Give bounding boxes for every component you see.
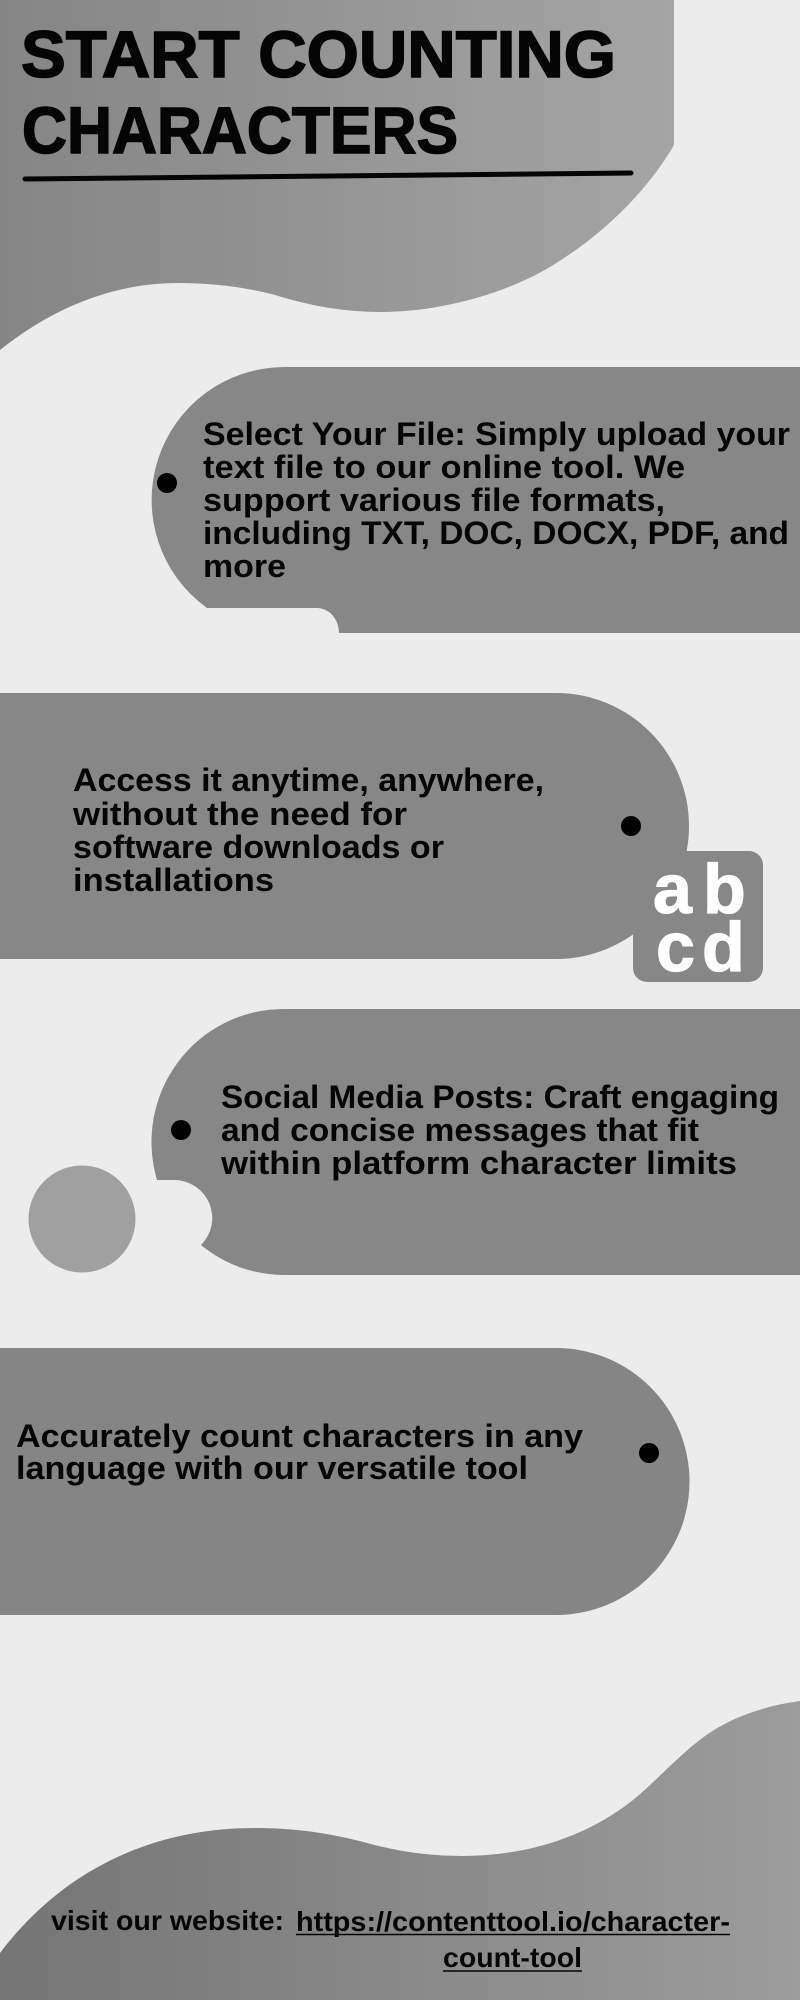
panel: social media posts (151, 1009, 800, 1275)
panel: accurately count (0, 1348, 690, 1615)
panel 2 background (0, 693, 689, 959)
panel 3 bullet (171, 1120, 191, 1140)
panel 1 bullet (157, 473, 177, 493)
panel 4 text: language with our versatile tool (16, 1450, 528, 1486)
panel 4 text: Accurately count characters in any (16, 1418, 583, 1454)
panel 4 text (16, 1418, 583, 1486)
panel 1 text (203, 416, 790, 584)
panel: access anytime (0, 693, 689, 959)
panel 1 text: more (203, 548, 286, 584)
panel 1 background (152, 367, 800, 633)
panel 2 text: Access it anytime, anywhere, (73, 762, 544, 798)
title: START COUNTING (21, 17, 616, 91)
icon: abcd letter tile: a (653, 850, 693, 928)
icon: abcd letter tile: b (703, 850, 746, 928)
footer label: visit our website: (51, 1905, 284, 1936)
panel 2 text: software downloads or (73, 829, 444, 865)
icon: abcd letter tile (633, 850, 763, 986)
icon: abcd letter tile: d (702, 908, 745, 986)
header wave shape (0, 0, 674, 350)
title underline (25, 173, 631, 179)
panel 3 text: within platform character limits (220, 1145, 737, 1181)
decorative grey circle (28, 1166, 136, 1272)
footer link (296, 1906, 730, 1973)
title: CHARACTERS (22, 93, 458, 167)
panel 1 text: Select Your File: Simply upload your (203, 416, 790, 452)
footer link: count-tool (443, 1942, 582, 1973)
icon: abcd letter tile: c (656, 908, 695, 986)
panel 3 text (220, 1079, 779, 1181)
title (21, 17, 616, 167)
panel 3 text: Social Media Posts: Craft engaging (221, 1079, 779, 1115)
panel 2 bullet (621, 816, 641, 836)
panel 1 text: text file to our online tool. We (203, 449, 685, 485)
footer link: https://contenttool.io/character- (296, 1906, 730, 1937)
panel 3 text: and concise messages that fit (221, 1112, 699, 1148)
panel 4 bullet (639, 1443, 659, 1463)
panel 1 text: support various file formats, (203, 482, 665, 518)
panel 2 text (72, 762, 544, 898)
panel 2 text: installations (73, 862, 274, 898)
panel 4 background (0, 1348, 690, 1615)
footer wave shape (0, 1701, 800, 2000)
footer: website call to action (51, 1905, 730, 1973)
panel: select your file (152, 367, 800, 633)
panel 1 text: including TXT, DOC, DOCX, PDF, and (203, 515, 789, 551)
panel 2 text: without the need for (72, 796, 407, 832)
panel 3 background (151, 1009, 800, 1275)
